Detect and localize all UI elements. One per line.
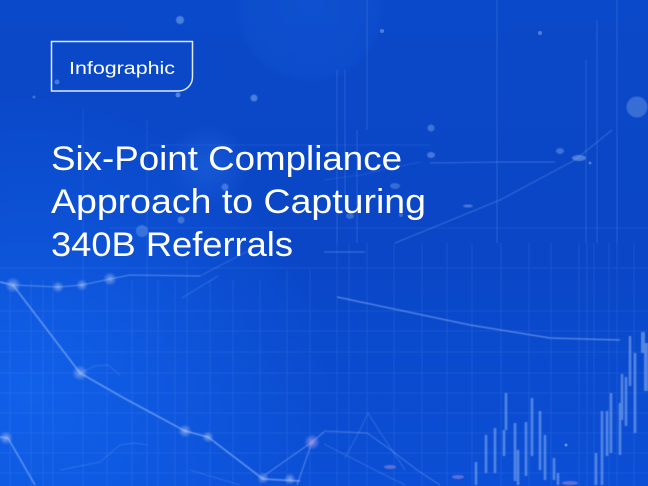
upper trend line right bbox=[324, 130, 620, 485]
badge: Infographic bbox=[52, 42, 192, 91]
brighter vertical lines bbox=[337, 0, 617, 243]
bar spikes right bbox=[476, 332, 646, 485]
network nodes left bbox=[0, 272, 320, 485]
title: Six-Point Compliance bbox=[51, 140, 402, 178]
grid lines bbox=[0, 110, 648, 486]
pink highlights bbox=[384, 465, 578, 485]
network line chart left bbox=[0, 250, 324, 485]
badge: Infographic: Infographic bbox=[69, 58, 175, 78]
title: Approach to Capturing bbox=[51, 183, 426, 221]
title: 340B Referrals bbox=[51, 226, 293, 264]
title bbox=[51, 140, 426, 264]
